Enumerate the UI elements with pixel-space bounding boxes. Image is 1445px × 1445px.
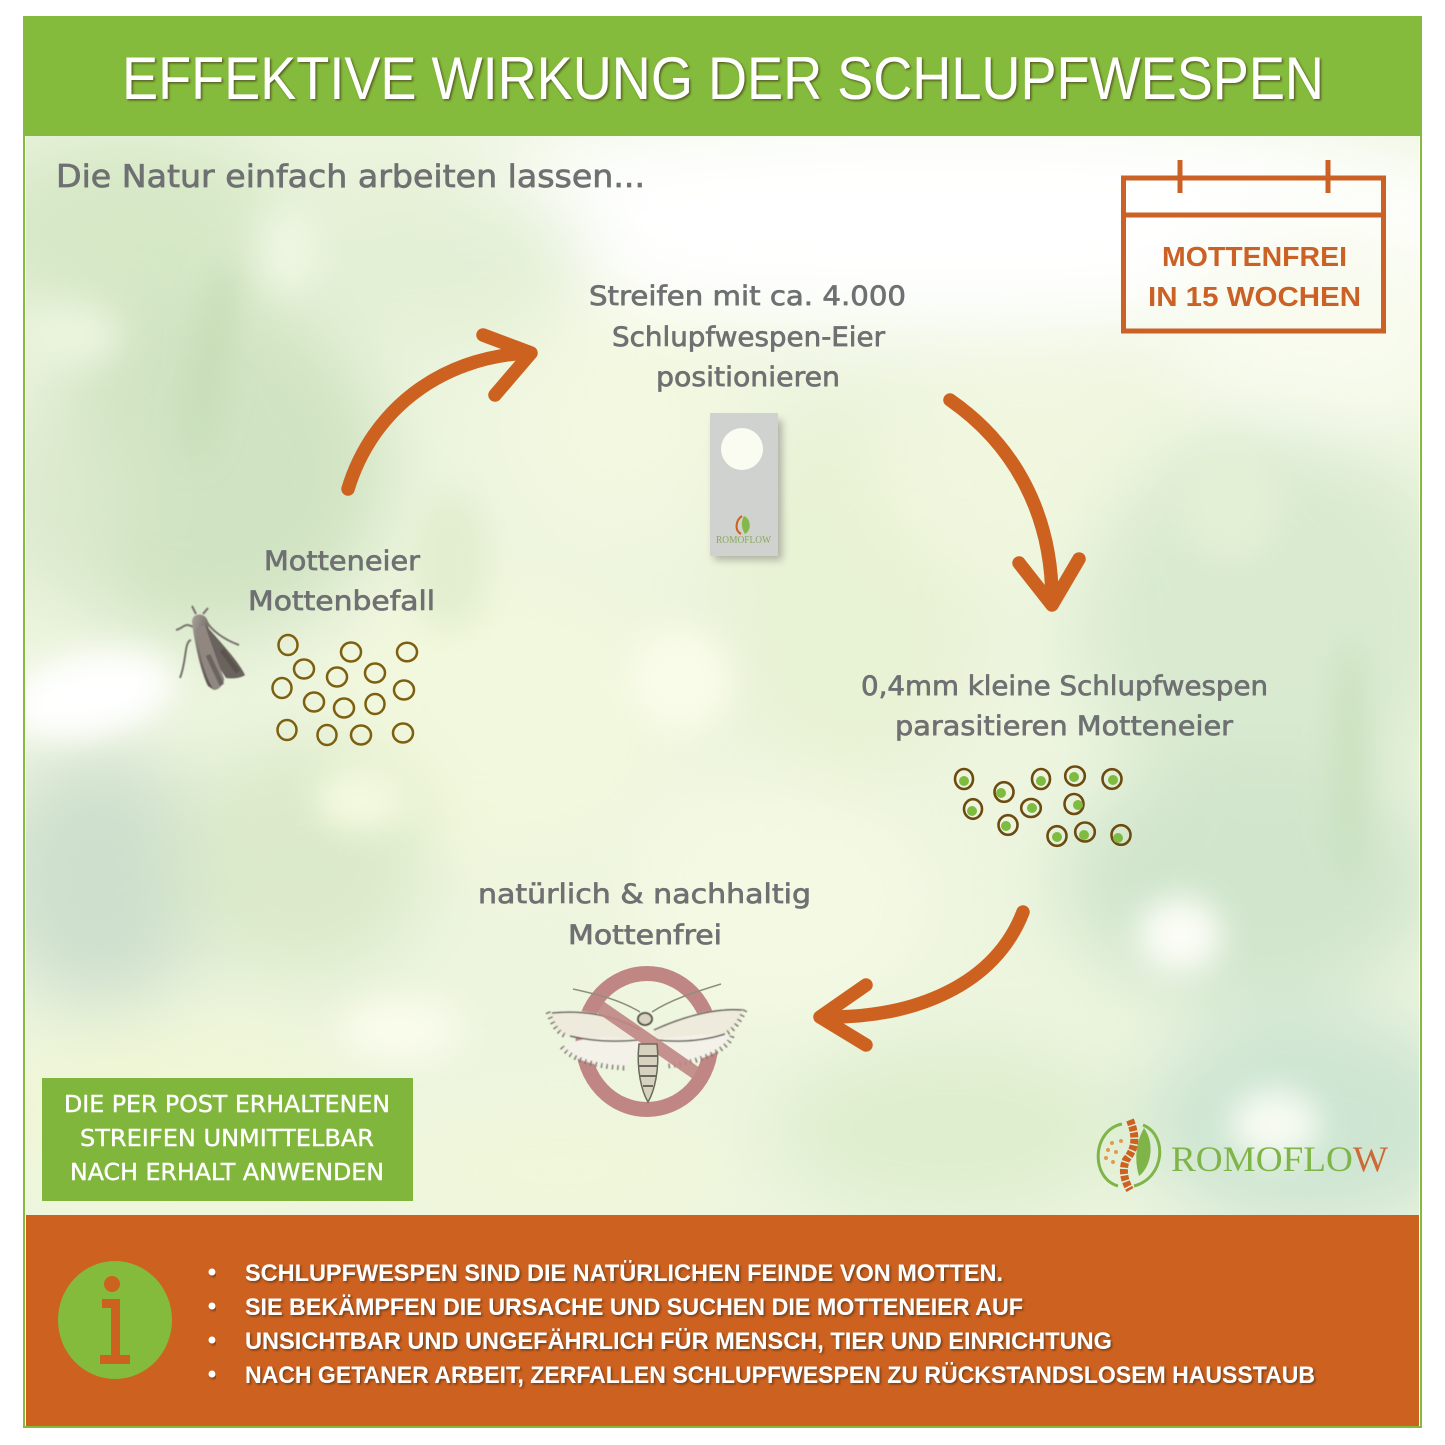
- icon: crossed-out moth: [548, 974, 745, 1110]
- logo: ROMOFLOW: [1171, 1139, 1388, 1179]
- bullet list: UNSICHTBAR UND UNGEFÄHRLICH FÜR MENSCH, TIER UND EINRICHTUNG: [245, 1328, 1112, 1355]
- icon: parasitised eggs: [955, 766, 1130, 846]
- title banner: [24, 17, 1421, 136]
- bullet list: SIE BEKÄMPFEN DIE URSACHE UND SUCHEN DIE MOTTENEIER AUF: [245, 1294, 1023, 1321]
- icon: hanging strip: [710, 413, 782, 560]
- step: strip text: Schlupfwespen-Eier: [612, 322, 886, 353]
- bullet list: NACH GETANER ARBEIT, ZERFALLEN SCHLUPFWESPEN ZU RÜCKSTANDSLOSEM HAUSSTAUB: [245, 1362, 1315, 1389]
- icon: moth eggs: [272, 635, 417, 745]
- step: infestation text: [248, 546, 435, 617]
- step: infestation text: Mottenbefall: [248, 586, 435, 617]
- arrow: infestation to strip: [348, 335, 531, 489]
- calendar badge: [1123, 160, 1384, 331]
- step: moth-free text: [478, 879, 811, 951]
- title banner: EFFEKTIVE WIRKUNG DER SCHLUPFWESPEN: [122, 45, 1324, 112]
- icon: info: [58, 1261, 172, 1379]
- bullet list: SCHLUPFWESPEN SIND DIE NATÜRLICHEN FEINDE VON MOTTEN.: [245, 1260, 1003, 1287]
- notice box: [42, 1078, 413, 1201]
- step: strip text: Streifen mit ca. 4.000: [589, 281, 906, 312]
- calendar badge: IN 15 WOCHEN: [1148, 281, 1361, 312]
- step: wasps text: [861, 671, 1268, 742]
- step: strip text: [589, 281, 906, 393]
- arrow: strip to wasps: [950, 400, 1079, 605]
- step: moth-free text: Mottenfrei: [568, 920, 722, 951]
- calendar badge: MOTTENFREI: [1162, 241, 1347, 272]
- bullet list: [208, 1260, 1315, 1389]
- step: wasps text: 0,4mm kleine Schlupfwespen: [861, 671, 1268, 702]
- notice box: NACH ERHALT ANWENDEN: [70, 1160, 384, 1186]
- icon: moth: [176, 606, 245, 690]
- tagline: Die Natur einfach arbeiten lassen...: [56, 159, 645, 195]
- step: moth-free text: natürlich & nachhaltig: [478, 879, 811, 910]
- step: wasps text: parasitieren Motteneier: [895, 711, 1234, 742]
- logo: [1098, 1120, 1388, 1190]
- notice box: STREIFEN UNMITTELBAR: [80, 1126, 374, 1152]
- notice box: DIE PER POST ERHALTENEN: [64, 1092, 390, 1118]
- info footer: [26, 1215, 1419, 1426]
- step: infestation text: Motteneier: [264, 546, 421, 577]
- arrow: wasps to moth-free: [820, 912, 1023, 1045]
- step: strip text: positionieren: [656, 362, 840, 393]
- icon: hanging strip: ROMOFLOW: [716, 535, 772, 546]
- blurred meadow background: [0, 110, 1445, 1230]
